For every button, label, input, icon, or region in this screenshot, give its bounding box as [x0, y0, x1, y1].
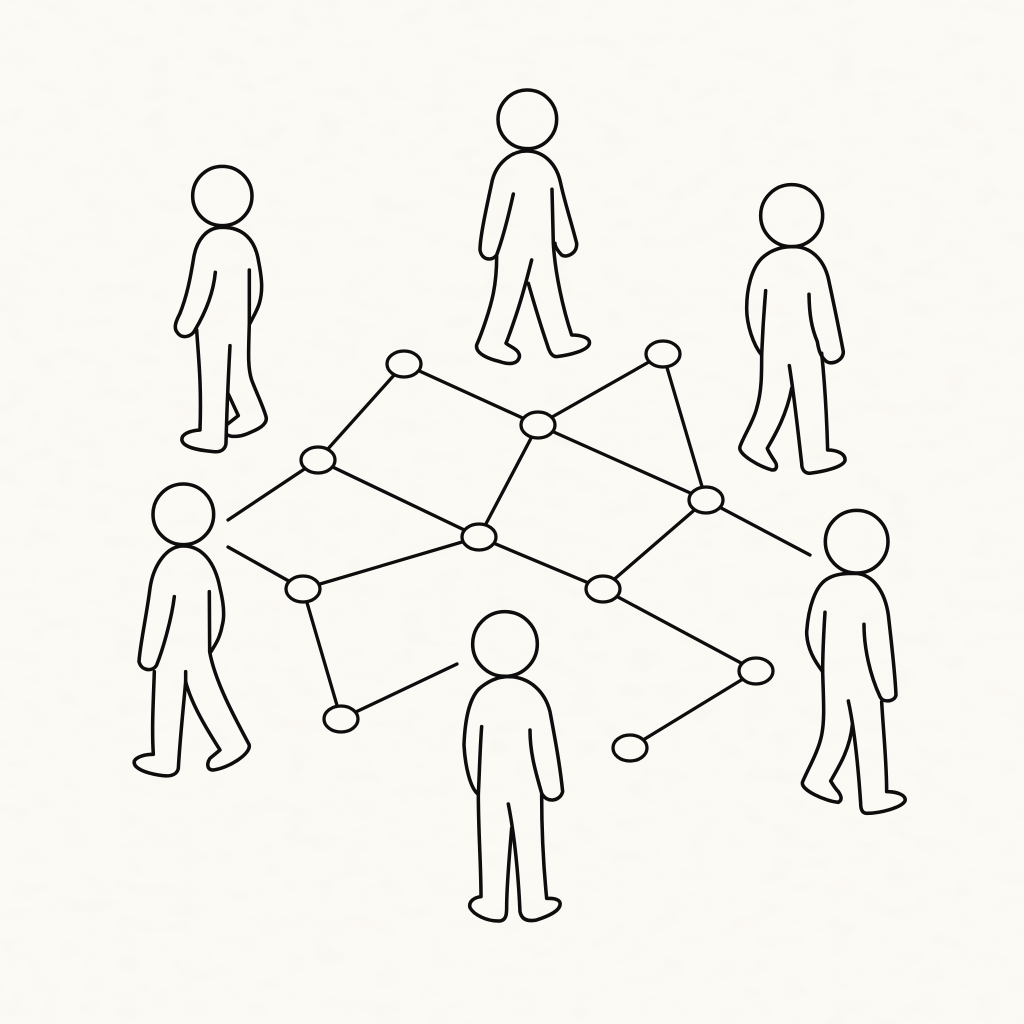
person: top center: [477, 90, 589, 363]
person: upper right: [740, 185, 845, 473]
network nodes: [286, 341, 773, 761]
person: bottom center: [464, 612, 563, 921]
person: upper left: [175, 166, 266, 452]
network diagram: [228, 341, 810, 761]
network connecting lines: [228, 354, 810, 748]
person: left: [134, 484, 249, 776]
person: right: [802, 510, 905, 813]
